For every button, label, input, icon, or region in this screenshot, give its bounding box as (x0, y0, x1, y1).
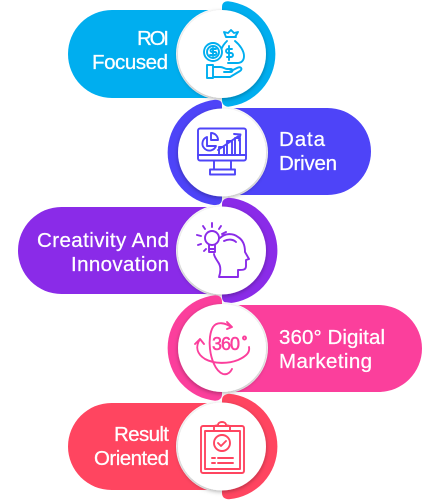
arc (222, 1, 275, 107)
icon: 360 degrees: 360 (212, 334, 240, 354)
label: Focused (92, 51, 168, 74)
pill (68, 10, 238, 98)
pill (206, 305, 422, 392)
label: ROI (137, 27, 169, 50)
icon: clipboard with check (201, 422, 244, 473)
icon: monitor with chart (198, 128, 246, 174)
row 5: Result Oriented (68, 394, 277, 499)
label: Data (279, 128, 326, 151)
arc (168, 295, 222, 401)
label: Driven (279, 152, 337, 175)
badge (178, 206, 266, 294)
pill (206, 108, 371, 195)
badge gap (176, 106, 268, 198)
pill (68, 403, 238, 490)
label: Result (114, 423, 169, 446)
badge (178, 10, 266, 98)
row 1: ROI Focused (68, 1, 275, 107)
label (279, 128, 337, 175)
badge gap (176, 400, 268, 492)
row 3: Creativity And Innovation (18, 198, 277, 303)
label: Oriented (94, 447, 169, 470)
icon: 360 degrees (195, 322, 249, 374)
badge gap (176, 204, 268, 296)
arc (222, 198, 277, 303)
row 4: 360° Digital Marketing (168, 295, 422, 401)
badge (178, 304, 266, 392)
badge (178, 108, 266, 196)
label (37, 229, 169, 276)
badge (178, 402, 266, 490)
label: Marketing (279, 350, 372, 373)
label (279, 326, 385, 373)
arc (168, 100, 222, 205)
label (94, 423, 169, 470)
label: 360° Digital (279, 326, 385, 349)
label: Creativity And (37, 229, 169, 252)
icon: head with light bulb (197, 223, 249, 277)
label: Innovation (71, 253, 169, 276)
label (92, 27, 169, 74)
row 2: Data Driven (168, 100, 371, 205)
arc (222, 394, 277, 499)
badge gap (176, 8, 268, 100)
badge gap (176, 302, 268, 394)
icon: money bag in hand (204, 30, 244, 78)
pill (18, 207, 238, 294)
